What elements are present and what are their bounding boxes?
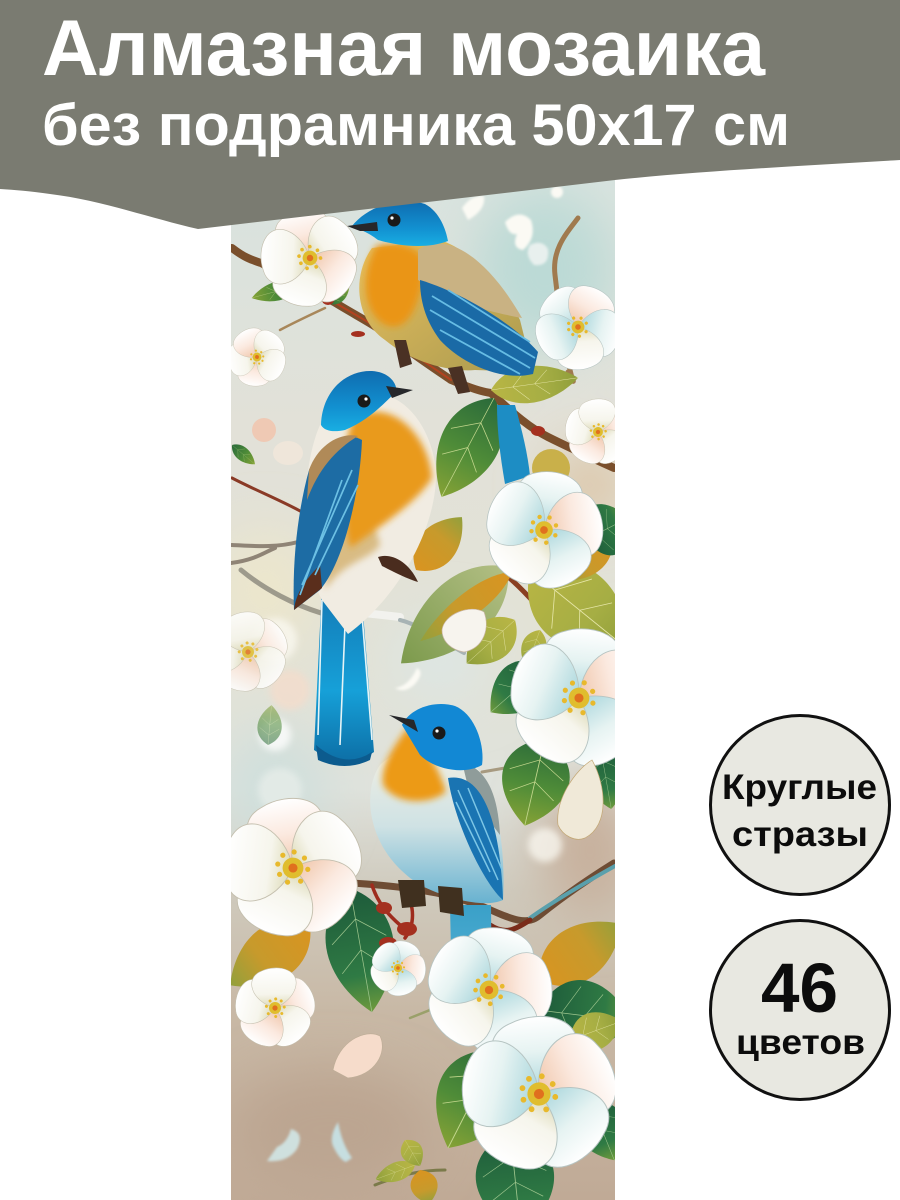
branches: [231, 218, 615, 1185]
red buds: [322, 295, 545, 949]
chest: [383, 727, 446, 801]
chest: [366, 243, 425, 327]
painting panel: [231, 180, 615, 1200]
flowers: [231, 214, 615, 1170]
body: [305, 395, 436, 634]
painting background: [231, 180, 615, 1200]
feet: [398, 880, 464, 916]
foot: [378, 556, 418, 582]
wing: [420, 280, 538, 376]
head: [352, 201, 448, 246]
bird: bottom: [370, 704, 504, 940]
eye: [432, 726, 446, 740]
feet: [394, 340, 470, 394]
header banner: [0, 0, 900, 229]
beak: [389, 715, 418, 732]
bird: middle: [294, 371, 436, 766]
tail: [450, 905, 492, 940]
wing: [294, 437, 362, 610]
eye: [358, 394, 370, 408]
shoulder: [418, 244, 522, 318]
back: [464, 768, 500, 835]
badge: 46 colours: [710, 920, 890, 1100]
body: [370, 750, 503, 903]
head: [321, 371, 396, 431]
flower buds: [252, 418, 603, 1078]
badge: 46 colours: цветов: [736, 1023, 865, 1062]
wing: [448, 777, 503, 900]
tail: [314, 585, 374, 762]
badge: round rhinestones: [710, 716, 890, 894]
chest: [343, 412, 432, 548]
body: [359, 240, 533, 372]
badge: round rhinestones: Круглые: [722, 768, 877, 807]
beak: [347, 222, 378, 231]
belly fluff: [325, 522, 380, 590]
bird: top: [347, 201, 538, 484]
head: [402, 704, 483, 770]
badge: round rhinestones: стразы: [732, 815, 868, 854]
beak: [386, 386, 413, 398]
badge: 46 colours: 46: [761, 949, 838, 1027]
title: Алмазная мозаика: [42, 3, 766, 92]
golden ball: [532, 449, 570, 476]
subtitle: без подрамника 50х17 см: [42, 93, 790, 158]
eye: [388, 214, 400, 226]
leaves: [231, 282, 615, 1200]
tail: [497, 405, 530, 484]
